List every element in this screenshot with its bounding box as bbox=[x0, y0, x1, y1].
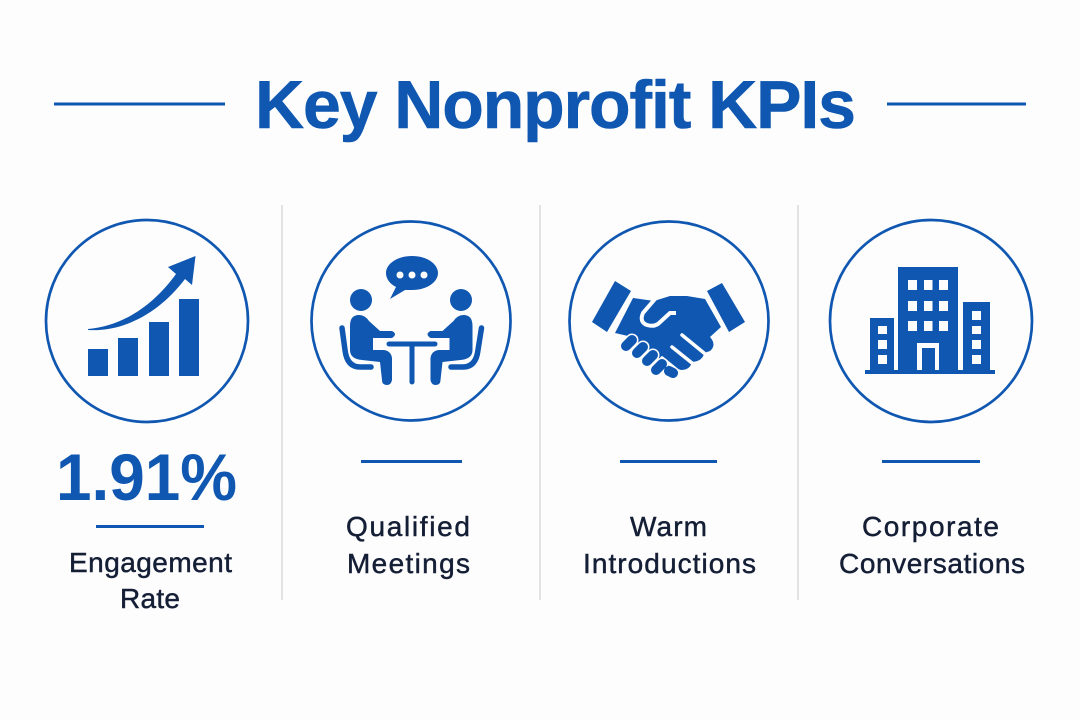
panel: warm introductions bbox=[570, 222, 768, 579]
label: warm introductions: Introductions bbox=[583, 548, 756, 579]
icon: office buildings bbox=[830, 220, 1032, 422]
label: qualified meetings: Meetings bbox=[347, 548, 470, 579]
title: Key Nonprofit KPIs bbox=[255, 67, 856, 143]
metric value: 1.91% bbox=[56, 440, 237, 514]
panel: corporate conversations bbox=[830, 220, 1032, 579]
label: engagement rate: Rate bbox=[120, 583, 180, 614]
panel: qualified meetings bbox=[312, 222, 510, 579]
icon: rising bar chart with arrow bbox=[46, 220, 248, 422]
label: corporate conversations: Corporate bbox=[862, 511, 999, 542]
label: corporate conversations: Conversations bbox=[839, 548, 1025, 579]
icon: handshake bbox=[570, 222, 768, 420]
panel: engagement rate bbox=[46, 220, 248, 614]
label: engagement rate: Engagement bbox=[69, 547, 232, 578]
icon: two people meeting at a table bbox=[312, 222, 510, 420]
label: qualified meetings: Qualified bbox=[346, 511, 470, 542]
label: warm introductions: Warm bbox=[630, 511, 707, 542]
